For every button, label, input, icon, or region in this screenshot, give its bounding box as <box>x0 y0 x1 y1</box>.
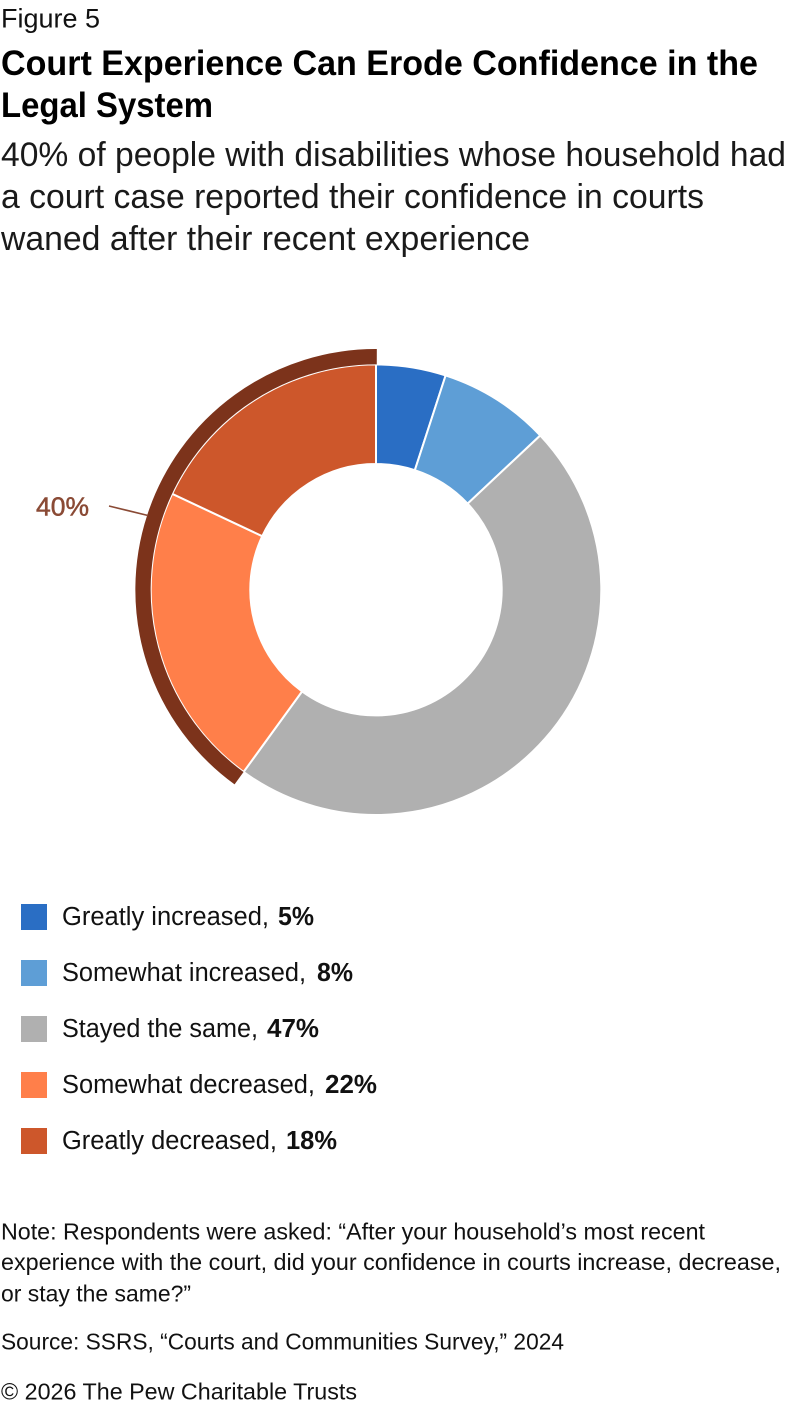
slice: somewhat increased 8% <box>415 375 540 504</box>
legend item: stayed the same: 47% <box>267 1015 319 1043</box>
title <box>1 43 758 125</box>
copyright: © 2026 The Pew Charitable Trusts <box>1 1378 357 1404</box>
legend <box>21 903 377 1155</box>
title: Court Experience Can Erode Confidence in the <box>1 43 758 83</box>
note: experience with the court, did your confidence in courts increase, decrease, <box>1 1249 781 1275</box>
legend item: greatly decreased: Greatly decreased, <box>62 1127 277 1155</box>
legend item: greatly increased: Greatly increased, <box>62 903 269 931</box>
donut chart <box>36 357 601 815</box>
legend item: stayed the same: Stayed the same, <box>62 1015 258 1043</box>
slice: somewhat decreased 22% <box>151 494 302 772</box>
legend item: greatly decreased <box>21 1127 337 1155</box>
slice: greatly decreased 18% <box>172 364 376 536</box>
subtitle: waned after their recent experience <box>0 220 530 258</box>
note <box>1 1218 781 1306</box>
figure label: Figure 5 <box>1 4 100 34</box>
legend item: somewhat increased: 8% <box>317 959 353 987</box>
slice: stayed the same 47% <box>244 435 601 815</box>
legend item: greatly decreased: 18% <box>286 1127 337 1155</box>
subtitle: a court case reported their confidence in courts <box>1 178 704 216</box>
note: Note: Respondents were asked: “After your household’s most recent <box>1 1218 706 1244</box>
source: Source: SSRS, “Courts and Communities Survey,” 2024 <box>1 1328 564 1354</box>
slice: greatly increased 5% <box>376 364 446 470</box>
legend item: somewhat decreased: Somewhat decreased, <box>62 1071 315 1099</box>
legend item: somewhat decreased: 22% <box>325 1071 377 1099</box>
callout leader line <box>109 506 148 516</box>
title: Legal System <box>1 85 213 125</box>
subtitle <box>0 136 786 258</box>
subtitle: 40% of people with disabilities whose household had <box>1 136 786 174</box>
legend item: stayed the same <box>21 1015 319 1043</box>
callout value: 40% <box>36 492 89 522</box>
legend item: greatly increased: 5% <box>278 903 314 931</box>
legend item: somewhat increased: Somewhat increased, <box>62 959 306 987</box>
note: or stay the same?” <box>1 1280 191 1306</box>
highlight arc: 40% decreased <box>143 357 377 778</box>
